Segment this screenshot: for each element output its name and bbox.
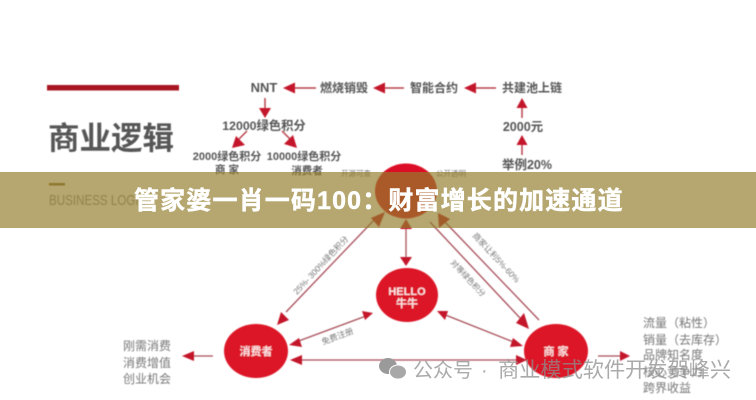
heading accent dash xyxy=(49,183,65,186)
caption: 开源可查: 开源可查 xyxy=(341,168,371,178)
title band xyxy=(0,172,756,228)
arrow: NNT down to points xyxy=(259,98,271,118)
merchant benefits list xyxy=(643,315,727,395)
connector: consumer to merchant xyxy=(296,359,522,361)
edge label: 商家让利5%-60%: 商家让利5%-60% xyxy=(471,231,522,285)
label: 10000绿色积分: 10000绿色积分 xyxy=(267,149,341,163)
arrow: contract to burn xyxy=(373,82,404,94)
captions beside top circle xyxy=(341,168,466,178)
icon: chat bubbles xyxy=(379,358,406,379)
merchant benefits list: 流量（粘性） xyxy=(643,315,715,330)
label: 举例20%: 举例20% xyxy=(502,157,552,172)
node: 消费者 xyxy=(224,324,288,378)
label: 智能合约: 智能合约 xyxy=(410,80,458,95)
watermark text: · xyxy=(481,360,488,382)
consumer benefits list: 刚需消费 xyxy=(123,339,171,353)
watermark text: 公众号 xyxy=(413,359,473,382)
consumer benefits list xyxy=(123,339,171,386)
token flow: left tree xyxy=(193,98,341,177)
arrowhead: consumer from HELLO xyxy=(289,338,302,347)
title text: 管家婆一肖一码100：财富增长的加速通道 xyxy=(134,187,624,215)
connector: merchant to top outer xyxy=(445,222,539,320)
subheading: business logic: BUSINESS LOGIC xyxy=(49,192,147,209)
arrowhead: at merchant from top xyxy=(516,313,529,329)
connector: consumer to HELLO xyxy=(296,316,366,342)
arrowhead: HELLO from merchant xyxy=(437,311,448,320)
consumer benefits list: 创业机会 xyxy=(123,372,171,386)
connector: consumer left out xyxy=(194,355,213,357)
arrowhead: right output xyxy=(620,351,630,361)
consumer benefits list: 消费增值 xyxy=(123,355,171,370)
connector: top to HELLO xyxy=(405,226,407,258)
label: 2000绿色积分: 2000绿色积分 xyxy=(193,149,261,163)
connector: top to merchant inner xyxy=(430,222,520,318)
connector: top to consumer xyxy=(286,218,376,312)
arrowheads xyxy=(182,212,630,365)
arrowhead: merchant from consumer xyxy=(516,355,527,365)
arrow: 2000 up to pool xyxy=(516,98,528,118)
arrow: to merchant points xyxy=(232,131,247,148)
edge label: 对等绿色积分: 对等绿色积分 xyxy=(449,258,488,299)
merchant benefits list: 销量（去库存） xyxy=(643,332,727,347)
node: 商家 xyxy=(524,324,588,378)
edge label: 25%-300%绿色积分: 25%- 300%绿色积分 xyxy=(291,234,350,296)
arrowhead: at top down xyxy=(400,219,412,229)
merchant benefits list: 跨界收益 xyxy=(643,381,691,395)
edge label: 免费注册: 免费注册 xyxy=(320,326,355,347)
heading rule xyxy=(47,85,179,90)
arrow: 20% up to 2000 xyxy=(516,135,528,155)
watermark text: 商业模式软件开发贺峰兴 xyxy=(498,358,731,382)
arrowhead: left output xyxy=(182,351,194,361)
arrow: pool to contract xyxy=(464,82,496,94)
node: HELLO 牛牛 xyxy=(376,268,438,322)
arrowhead: at top from merchant xyxy=(438,213,450,228)
arrowhead: at HELLO xyxy=(400,257,412,266)
connector: merchant right out xyxy=(598,355,622,357)
node: top circle xyxy=(375,164,437,218)
caption: 公开透明: 公开透明 xyxy=(436,169,466,178)
token flow: right column xyxy=(502,98,552,172)
arrow: burn to NNT xyxy=(283,82,316,94)
node: 消费者: 消费者 xyxy=(240,344,272,358)
arrowhead: HELLO from consumer xyxy=(362,311,373,320)
arrowhead: merchant from HELLO xyxy=(510,338,523,347)
triangle connectors xyxy=(194,218,622,360)
label: NNT: NNT xyxy=(251,80,277,95)
arrow: to consumer points xyxy=(282,131,297,148)
label: 燃烧销毁: 燃烧销毁 xyxy=(320,80,368,95)
arrowhead: at top from consumer xyxy=(371,212,385,227)
merchant benefits list: 品牌知名度 xyxy=(643,347,703,362)
heading: 商业逻辑: 商业逻辑 xyxy=(48,120,174,156)
rotated edge labels xyxy=(291,231,522,347)
label: 共建池上链: 共建池上链 xyxy=(502,80,562,95)
node: 商家: 商 家 xyxy=(543,344,569,358)
label: 2000元: 2000元 xyxy=(503,120,544,134)
arrowhead: consumer from merchant xyxy=(290,355,302,365)
watermark xyxy=(379,358,731,382)
merchant benefits list: 核心竞争力 xyxy=(643,365,703,379)
arrowhead: at consumer from top xyxy=(277,312,289,325)
token flow: top row xyxy=(251,80,562,95)
connector: HELLO to merchant xyxy=(443,314,516,343)
node: HELLO 牛牛: 牛牛 xyxy=(396,296,418,310)
label: 商家: 商 家 xyxy=(215,163,239,176)
node: HELLO 牛牛: HELLO xyxy=(388,286,426,298)
label: 12000绿色积分: 12000绿色积分 xyxy=(222,118,306,133)
label: 消费者: 消费者 xyxy=(291,164,323,177)
